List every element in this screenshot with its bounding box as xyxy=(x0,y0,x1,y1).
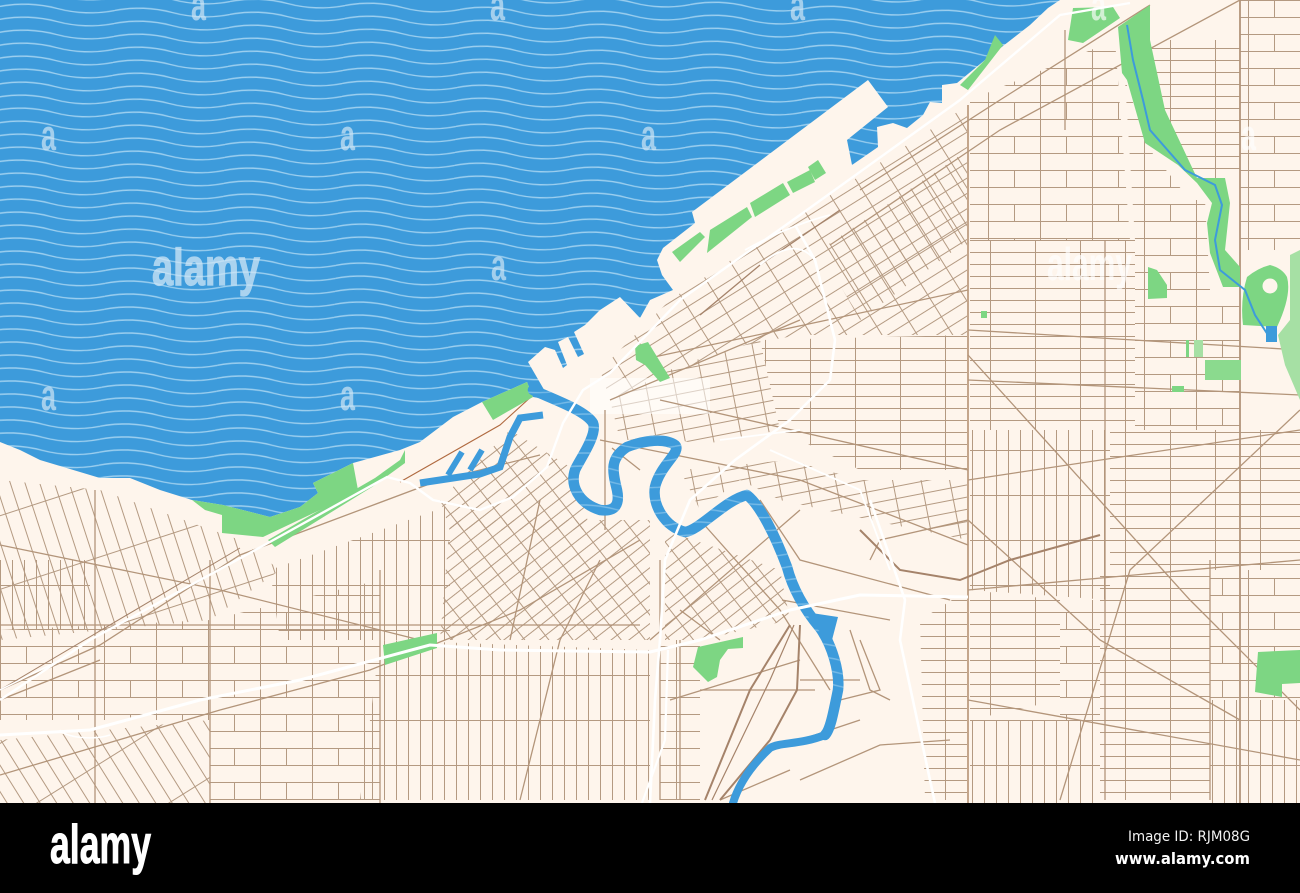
park: burke lakefront xyxy=(672,160,826,262)
park: downtown mall xyxy=(635,342,670,382)
rail lines xyxy=(0,210,1100,800)
footer image id: Image ID: RJM08G xyxy=(1128,829,1250,845)
lake watermarks: small letters: a xyxy=(641,111,656,160)
highways xyxy=(0,3,1130,803)
river bay xyxy=(805,612,838,640)
parks: small east side green spaces xyxy=(981,267,1241,392)
park: wade park xyxy=(1242,250,1300,400)
footer alamy logo: alamy xyxy=(50,813,151,875)
lake watermarks: small letters: a xyxy=(340,111,355,160)
lake watermarks: small letters: a xyxy=(491,241,506,290)
bottom black footer band xyxy=(0,803,1300,893)
old river channel and harbor xyxy=(420,415,543,483)
park: edgewater xyxy=(192,463,358,537)
cuyahoga river xyxy=(533,390,838,803)
park: lakefront strip xyxy=(960,35,1003,90)
lake watermarks: small letters xyxy=(41,0,805,420)
brook stream xyxy=(1127,25,1268,335)
park: northeast lakefront xyxy=(1068,7,1120,43)
lake watermarks: small letters: a xyxy=(41,111,56,160)
land watermark: a xyxy=(1241,111,1256,160)
footer url: www.alamy.com xyxy=(1115,849,1250,868)
washed-out downtown core xyxy=(590,378,710,414)
park: flats south xyxy=(693,637,743,682)
park: shoreway strip xyxy=(268,450,405,547)
park: southeast xyxy=(1255,650,1300,697)
park: whiskey island xyxy=(482,382,533,420)
park: doan brook gardens xyxy=(1118,5,1240,287)
lake watermark: large alamy wordmark: alamy xyxy=(152,239,260,297)
land watermark: alamy xyxy=(1047,238,1132,290)
park: west side xyxy=(383,633,437,665)
lake watermarks: small letters: a xyxy=(41,371,56,420)
lake watermarks: small letters: a xyxy=(340,371,355,420)
land watermark xyxy=(1047,0,1256,290)
